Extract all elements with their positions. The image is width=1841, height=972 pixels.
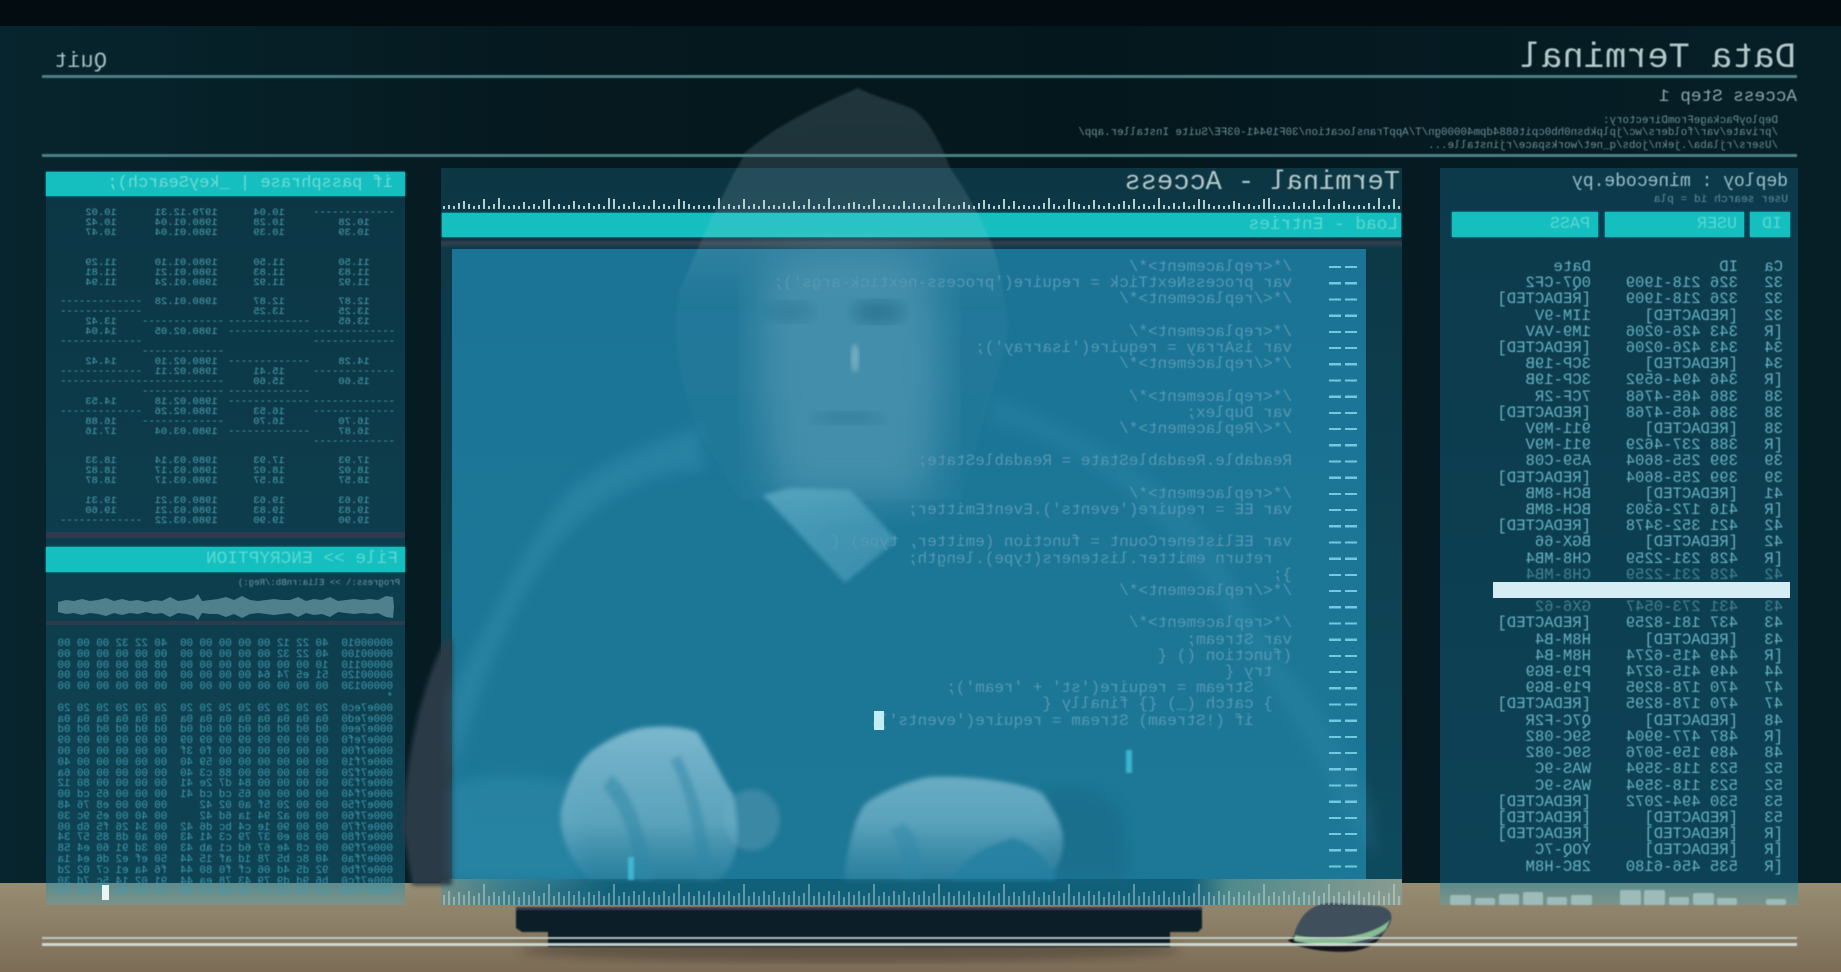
audio waveform	[58, 594, 394, 620]
data table	[1497, 258, 1783, 876]
line dashes	[1329, 259, 1341, 875]
nose highlight	[851, 344, 859, 372]
terminal title: Terminal - Access	[1125, 168, 1400, 198]
tick strip: top waveform	[443, 198, 1400, 209]
code listing: /*<replacement>*/ var processNextTick = require('process-nextick-args'); /*</replacement>*/ /*<replacement>*/ var isArray = require('isarray'); /*</replacement>*/ /*<replacement>*/ var Duplex; /*</Replacement>*/ Readable.ReadableState = ReadableState; /*<replacement>*/ var EE = require('events').EventEmitter; var EElistenerCount = function (emitter, type) { return emitter.listeners(type).length; }; /*</replacement>*/ /*<replacement>*/ var Stream; (function () { try { Stream = require('st' + 'ream'); } catch (_) {} finally { if (!Stream) Stream = require('events').	[774, 258, 1292, 730]
user column label: USER	[1697, 215, 1737, 234]
bar: pass column	[1452, 212, 1598, 237]
header: quit: Quit	[54, 49, 107, 74]
keyboard	[515, 906, 1203, 964]
left panel band	[46, 532, 405, 538]
left shoulder highlight	[452, 427, 705, 785]
progress label: Progress:\ >> Elia:rnBb:/Reg:)	[238, 578, 400, 588]
mouth shadow	[814, 412, 882, 424]
pass column label: PASS	[1550, 215, 1590, 234]
title: Data Terminal: Data Terminal	[1520, 38, 1796, 78]
panel: centre desk reflection	[441, 879, 1402, 905]
table: left date columns	[60, 207, 395, 527]
line dashes second	[1345, 259, 1357, 875]
hand: right	[845, 777, 1063, 880]
column one: ------------- 10.28 10.39 11.50 11.83 11.92 12.87 13.25 13.65 ------------- ------------- 14.28 ------------- 15.60 ------------- ------------- 16.70 16.87 ------------- 17.93 18.02 18.57 19.63 19.83 19.90	[313, 207, 395, 527]
cyan marks	[631, 750, 1129, 880]
panel: right background	[1440, 168, 1798, 883]
bar: encryption	[46, 547, 405, 572]
bottom rule lower	[42, 943, 1797, 946]
column two: 10.04 10.28 10.39 11.50 11.83 11.92 12.87 13.25 ------------- ------------- ------------- 15.41 15.60 ------------- ------------- 16.53 16.70 ------------- 17.93 18.02 18.57 19.63 19.83 19.90	[228, 207, 310, 527]
bar: passphrase	[46, 172, 405, 196]
user search label: User search id = pla	[1654, 194, 1788, 206]
collar V	[763, 488, 897, 583]
divider top	[42, 75, 1797, 78]
column Date: Date 0Q7-CF2 [REDACTED] 1IM-9V 1M9-VAV [REDACTED] 3CP-19B 3CP-19B 7CF-2R [REDACTED] 911-M9V 911-M9V A59-C08 [REDACTED] BCH-8MB BCH-8MB [REDACTED] BGX-66 CH8-MB4 CH8-MB4 GX6-62 [REDACTED] H8M-B4 H8M-B4 P19-BG9 P19-BG9 [REDACTED] Q7C-F2R S9C-082 S9C-082 WAS-9C WAS-9C [REDACTED] [REDACTED] [REDACTED] YOQ-7C 2BC-H8M	[1497, 258, 1591, 876]
dark torso outside screen left	[403, 640, 452, 885]
hand: left	[561, 727, 738, 880]
right sleeve	[1045, 788, 1128, 880]
bar: id column	[1750, 212, 1790, 237]
right shoulder highlight	[990, 393, 1378, 860]
bar: user column	[1605, 212, 1744, 237]
column four: 10.02 10.42 10.47 11.29 11.81 11.94 ------------- ------------- 13.42 14.04 ------------- 14.42 ------------- ------------- 14.53 ------------- 16.88 17.16 18.33 18.82 18.87 19.31 19.60 -------------	[60, 207, 142, 527]
left panel band two	[46, 621, 405, 625]
left sleeve	[452, 776, 585, 880]
thumb	[724, 789, 780, 851]
footer status blocks	[1450, 890, 1786, 906]
id column label: ID	[1762, 215, 1782, 234]
passphrase heading: if passphrase | _keySearch);	[107, 174, 393, 193]
code cursor	[874, 711, 884, 730]
column three: 1979.12.31 1980.01.04 1980.01.04 1980.01.10 1980.01.21 1980.01.24 1980.01.28 ------------- 1980.02.05 ------------- 1980.02.10 1980.02.11 ------------- ------------- 1980.02.18 1980.02.26 ------------- 1980.03.04 1980.03.14 1980.03.17 1980.03.17 1980.03.21 1980.03.21 1980.03.22	[142, 207, 224, 527]
hex cursor	[102, 885, 109, 900]
selected row highlight	[1493, 582, 1790, 598]
panel: left background	[46, 171, 405, 883]
subtitle: access step: Access Step 1	[1659, 87, 1797, 107]
mouse	[1288, 902, 1392, 953]
hood	[676, 88, 1008, 500]
eye shadow left	[766, 302, 814, 322]
face	[757, 255, 942, 500]
hood peak crease	[856, 92, 860, 130]
column Ca: Ca 32 32 32 [R 34 34 [R 38 38 38 [R 39 39 41 [R 42 42 [R 42 43 43 43 [R 44 47 47 48 [R 48 52 52 53 53 [R [R [R	[1764, 258, 1783, 876]
panel: left desk reflection	[46, 883, 405, 905]
load entries label: Load - Entries	[1249, 215, 1398, 235]
panel: centre screen area	[452, 249, 1366, 879]
bottom rule upper	[42, 937, 1797, 939]
hex dump: 00000010 40 22 12 00 00 00 00 00 40 22 32 00 00 00 00000100 40 22 32 00 00 00 00 00 00 00 00 00 00 00 00000110 10 00 00 00 00 00 00 00 08 00 00 00 00 00 00000120 51 e5 74 64 00 00 00 00 00 00 00 00 00 00 00000130 00 00 00 00 00 00 00 00 00 00 00 00 00 00 * 000e7ec0 20 20 20 20 20 20 20 20 20 20 20 20 20 20 000e7ed0 0a 0a 0a 0a 0a 0a 0a 0a 0a 0a 0a 0a 0a 0a 000e7ee0 0d 0d 0d 0d 0d 0d 0d 0d 0d 0d 0d 0d 0d 0d 000e7ef0 09 09 09 09 09 09 09 09 09 09 09 09 09 09 000e7f00 00 00 00 00 00 00 f0 3f 00 00 00 00 00 00 000e7f10 00 00 00 00 00 00 59 40 00 00 00 00 00 40 000e7f20 00 00 00 00 00 88 c3 40 00 00 00 00 00 6a 000e7f30 00 00 00 00 84 d7 2e 41 00 00 00 00 80 12 000e7f40 00 00 00 00 65 cd cd 41 00 00 00 65 cd 00 000e7f50 00 00 20 5f a0 02 42 00 00 00 e8 76 48 000e7f60 00 00 a2 94 1a 6d 42 00 40 00 e5 9c 30 000e7f70 00 00 90 1e c4 bc d6 42 00 34 26 f5 6b 00 000e7f80 00 80 e0 37 79 c3 41 43 00 a0 d8 85 57 34 000e7f90 00 c8 4e 67 6d c1 ab 43 00 3d 91 60 e4 58 000e7fa0 40 8c b5 78 1d af 15 44 50 ef e2 d6 e4 1a 000e7fb0 92 d5 4d 06 cf f0 80 44 f6 4a e1 c7 02 2d 000e7fc0 b6 9d d9 79 43 78 ea 44 91 02 14 5c 7d 30 000e7fd0 a4 50 23 c7 14 ae 21 45 33 0c 9a 2f 61 74	[58, 638, 393, 898]
divider second	[42, 154, 1797, 157]
bar: load entries	[442, 213, 1401, 237]
tick strip: bottom waveform	[443, 884, 1400, 905]
path text: DeployPackageFromDirectory: /private/var/folders/wc/jplpkbsn0hb0cpit6884dpm40000gn/T/AppTranslocation/30F19441-03FE/Suite Installer.app/ /Users/rjlaba/.jekn/jobs/q_net/workspace/rjinstalle...	[1078, 115, 1778, 152]
header bars	[44, 170, 1792, 238]
panel: centre background	[441, 168, 1402, 883]
dark band under load bar	[441, 238, 1402, 248]
wooden desk surface	[0, 883, 1841, 972]
top black band	[0, 0, 1841, 26]
eye shadow	[852, 301, 904, 323]
panel: right desk reflection	[1440, 883, 1798, 905]
column ID: ID 326 218-1909 326 218-1909 [REDACTED] 343 426-0206 343 426-0206 [REDACTED] 346 494-6592 386 465-4768 386 465-4768 [REDACTED] 388 237-4629 399 255-8604 399 255-8604 [REDACTED] 416 172-6303 421 352-3478 [REDACTED] 428 231-2259 428 231-2259 431 273-0547 437 181-8259 [REDACTED] 449 415-6274 449 415-6274 470 178-8295 470 178-8295 [REDACTED] 487 477-9904 489 159-5076 523 118-3594 523 118-3594 530 494-2072 [REDACTED] [REDACTED] [REDACTED] 535 456-6180	[1626, 258, 1738, 876]
deploy title: deploy : minecode.py	[1572, 172, 1788, 192]
encryption heading: File >> ENCRYPTION	[206, 549, 398, 569]
